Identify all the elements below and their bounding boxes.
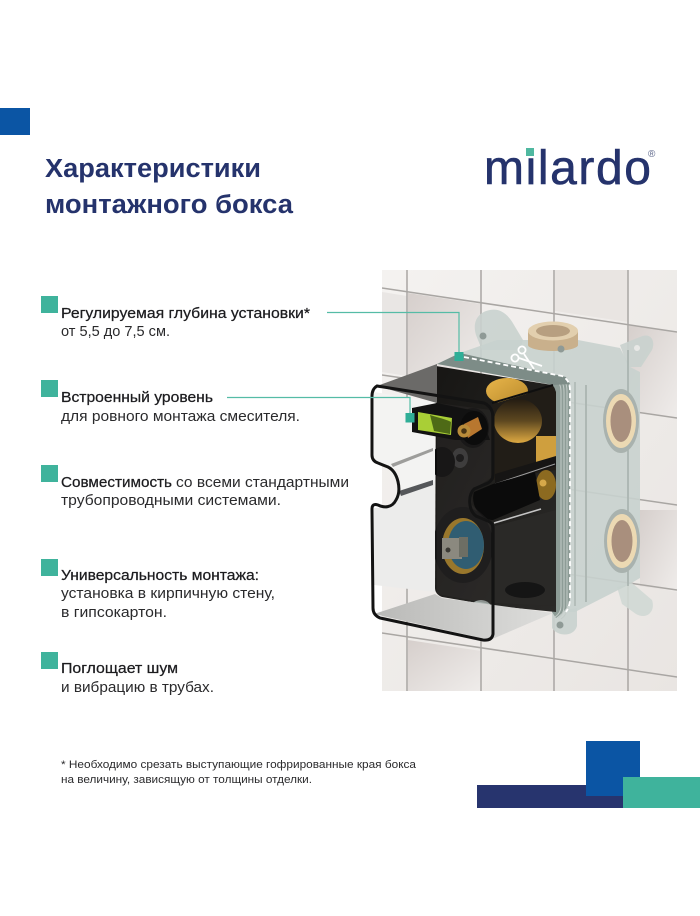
cover top face bbox=[377, 364, 437, 403]
feature 1: depth: от 5,5 до 7,5 см. bbox=[61, 324, 170, 340]
feature 2: level bbox=[41, 380, 300, 425]
logo: milardo: ® bbox=[648, 149, 656, 160]
logo: milardo: milardo bbox=[484, 142, 651, 195]
title bbox=[45, 155, 294, 219]
pipe seen through cover bbox=[391, 448, 433, 496]
translucent rear housing with lugs bbox=[460, 310, 653, 635]
feature 3: compatibility: со всеми стандартными bbox=[176, 475, 349, 491]
spirit level and fitting bbox=[412, 403, 490, 445]
feature 1: depth: Регулируемая глубина установки* bbox=[61, 306, 310, 322]
feature 3: compatibility: Совместимость bbox=[61, 475, 172, 491]
black cover outline bbox=[372, 386, 493, 640]
side brass ports bbox=[603, 389, 640, 573]
decorative colour blocks bbox=[477, 741, 700, 808]
title: Характеристики bbox=[45, 155, 261, 183]
footnote bbox=[61, 759, 417, 786]
cover vertical reflection bbox=[437, 403, 491, 604]
cover right top edge bbox=[492, 385, 553, 403]
feature 3: compatibility bbox=[41, 465, 349, 509]
feature 2: level: Встроенный уровень bbox=[61, 390, 213, 406]
feature 3: compatibility: трубопроводными системами. bbox=[61, 493, 281, 509]
feature 4: versatile mounting bbox=[41, 559, 275, 621]
dark inner body with brass valves bbox=[429, 366, 556, 620]
feature 4: versatile mounting: установка в кирпичную стену, bbox=[61, 586, 275, 602]
footnote: * Необходимо срезать выступающие гофрированные края бокса bbox=[61, 759, 417, 771]
wall tiles bbox=[382, 270, 677, 691]
corrugated box edge bbox=[552, 376, 570, 619]
cut line with scissors bbox=[464, 346, 570, 612]
feature 2: level: для ровного монтажа смесителя. bbox=[61, 409, 300, 425]
feature 5: noise absorption: и вибрацию в трубах. bbox=[61, 680, 214, 696]
feature 5: noise absorption: Поглощает шум bbox=[61, 661, 178, 677]
grey top flange bbox=[437, 353, 570, 385]
feature 1: depth bbox=[41, 296, 310, 340]
corner accent: blue square bbox=[0, 108, 30, 135]
footnote: на величину, зависящую от толщины отделки. bbox=[61, 774, 312, 786]
title: монтажного бокса bbox=[45, 191, 294, 219]
feature 4: versatile mounting: Универсальность монтажа: bbox=[61, 568, 259, 584]
feature 5: noise absorption bbox=[41, 652, 214, 696]
leader line: level bbox=[227, 398, 414, 422]
transparent front cover bbox=[374, 364, 553, 640]
leader line: depth bbox=[327, 312, 464, 361]
photo: mounting box on tiled wall bbox=[382, 270, 677, 691]
feature 4: versatile mounting: в гипсокартон. bbox=[61, 605, 167, 621]
top brass port bbox=[528, 322, 578, 352]
